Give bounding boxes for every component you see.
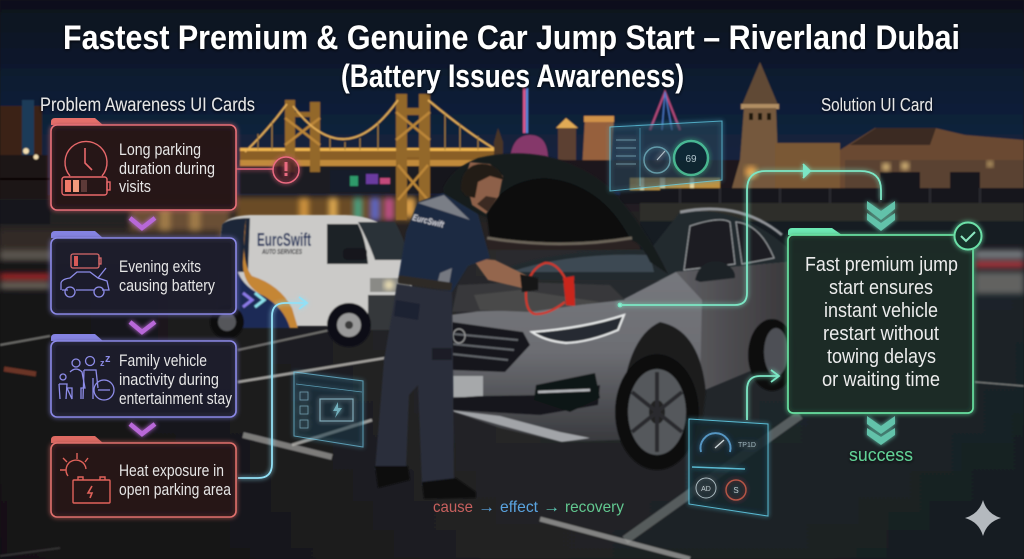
windshield: [500, 211, 790, 280]
text: Heat exposure in: [119, 462, 224, 480]
hologram panel: speed gauges: [689, 419, 768, 516]
hologram panel: speed gauges: S: [733, 486, 739, 495]
text: towing delays: [827, 346, 936, 368]
mirror: [695, 261, 735, 282]
text: [119, 352, 233, 408]
icon: low battery and car: [61, 254, 109, 297]
van logo: EurcSwift: [257, 230, 311, 250]
hologram panel: speed gauges: AD: [701, 486, 711, 493]
text: restart without: [823, 323, 939, 345]
trousers: [375, 284, 454, 486]
icon: sleeping family: z: [105, 353, 111, 365]
text: inactivity during: [119, 371, 219, 389]
panel: card 4 heat exposure: [51, 436, 236, 517]
arm and glove: [472, 258, 538, 292]
open bonnet: [443, 153, 668, 274]
connector arrow: cause to van: [238, 297, 307, 478]
text: start ensures: [829, 277, 933, 299]
water reflections: [0, 197, 416, 260]
label: cause effect recovery: recovery: [565, 499, 624, 516]
bridge: [240, 94, 502, 220]
label: cause effect recovery: →: [478, 499, 495, 516]
rear wheel: [748, 319, 796, 391]
text: [119, 258, 216, 295]
connector arrows: car to solution: [618, 164, 881, 420]
shirt: [398, 193, 490, 292]
hologram panel: battery diagnostic: [294, 372, 363, 447]
van chevrons: [243, 293, 264, 307]
parking lines: [0, 318, 1024, 559]
text: entertainment stay: [119, 390, 233, 408]
hologram panel: speed gauges: TP1D: [738, 442, 756, 449]
icon: sparkle watermark: [965, 500, 1001, 536]
label: cause effect recovery: cause: [433, 499, 473, 516]
panel: card 1 long parking: [51, 118, 236, 210]
car body: [445, 262, 790, 442]
chevrons into solution card: [867, 201, 895, 231]
text: or waiting time: [822, 369, 940, 391]
title: [63, 19, 960, 94]
red jumper cable and clamp: [526, 263, 575, 314]
boots: [375, 466, 476, 499]
SUV with open bonnet: [443, 153, 796, 470]
label: cause effect recovery: effect: [500, 499, 539, 516]
icon: sleeping family: z: [100, 358, 105, 368]
label: cause effect recovery: [433, 499, 624, 516]
front wheel: [615, 322, 706, 470]
mechanic in uniform: [375, 162, 538, 499]
text: Long parking: [119, 141, 201, 159]
hologram panel: dashboard gauges: 69: [685, 154, 697, 165]
text: instant vehicle: [824, 300, 938, 322]
van wheels: [210, 303, 371, 347]
castle tower: [730, 62, 782, 195]
right buildings: [640, 128, 1024, 253]
chevrons down between problem cards: [130, 218, 155, 434]
text: visits: [119, 178, 151, 196]
van logo: AUTO SERVICES: [261, 249, 302, 256]
text: causing battery: [119, 277, 216, 295]
van: EuroSwift service vehicle: [210, 215, 412, 347]
icon: check badge: [954, 222, 982, 250]
icon: clock and low battery: [62, 141, 110, 195]
label: cause effect recovery: →: [543, 499, 560, 516]
panel: card 3 family vehicle: [51, 334, 236, 417]
text: duration during: [119, 160, 215, 178]
connector: alert from card 1: [236, 157, 299, 183]
van logo: [257, 230, 311, 256]
icon: sleeping family: [59, 353, 114, 400]
hologram panel: dashboard gauges: [610, 121, 722, 191]
heading: problem cards: Problem Awareness UI Cards: [40, 95, 255, 116]
shirt logo: EurcSwift: [412, 212, 446, 230]
text: open parking area: [119, 481, 232, 499]
headlight: [532, 315, 624, 343]
chevrons to success: [867, 416, 895, 445]
text: Evening exits: [119, 258, 201, 276]
text: [119, 141, 215, 196]
side windows: [684, 220, 774, 270]
lower bumper: [450, 385, 600, 415]
plate: [452, 376, 483, 397]
panel: solution card: [788, 222, 982, 413]
light streaks left and right: [0, 250, 1024, 294]
engine bay: [452, 282, 625, 312]
title: (Battery Issues Awareness): [341, 58, 684, 94]
left buildings: [0, 100, 50, 224]
text: [119, 462, 232, 499]
head: [461, 162, 504, 214]
text: Family vehicle: [119, 352, 207, 370]
heading: solution card: Solution UI Card: [821, 95, 933, 115]
theme park skyline: [494, 88, 760, 204]
panel: card 2 evening exits: [51, 231, 236, 314]
label: success: success: [849, 445, 913, 465]
icon: sun and battery: [60, 453, 110, 503]
text: [805, 254, 958, 391]
grille: [450, 322, 530, 372]
text: Fast premium jump: [805, 254, 958, 276]
